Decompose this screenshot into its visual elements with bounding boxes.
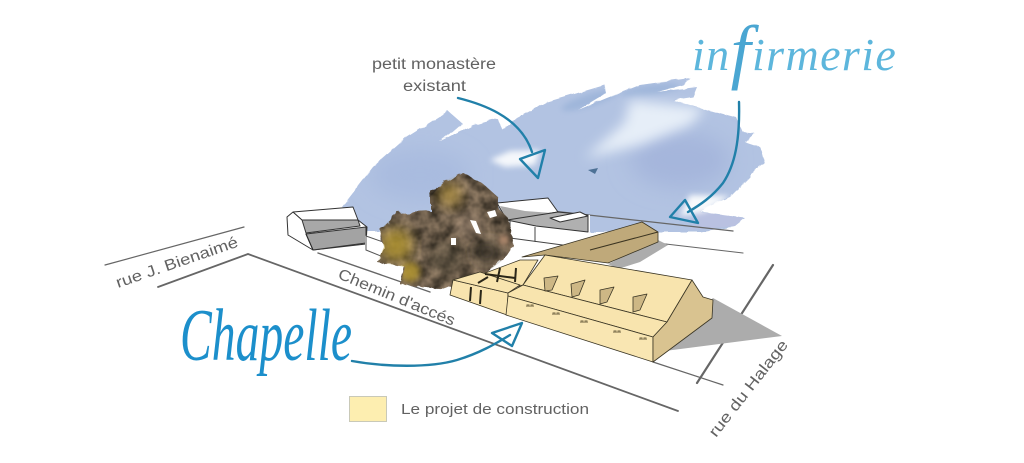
- arrow: Chapelle: [352, 323, 522, 366]
- construction project building: [450, 222, 713, 362]
- title: infirmerie: f: [731, 11, 760, 91]
- title: infirmerie: irmerie: [752, 29, 897, 80]
- dormers: [544, 276, 647, 312]
- left existing building: [287, 207, 367, 250]
- title: Chapelle: Chapelle: [180, 295, 352, 377]
- legend label: Le projet de construction: [401, 401, 589, 418]
- building shadows: [608, 240, 782, 352]
- right existing monastery building: [365, 198, 600, 285]
- label: petit monastère existant: petit monastère: [372, 56, 496, 73]
- arrow: infirmerie: [670, 102, 739, 223]
- tree: [377, 172, 513, 291]
- arrow: monastère: [458, 98, 545, 178]
- windows: [527, 305, 646, 340]
- road lines: [105, 205, 773, 411]
- title: infirmerie: in: [692, 29, 731, 80]
- label: petit monastère existant: existant: [403, 78, 467, 95]
- watercolor background wash: [342, 78, 764, 232]
- label: rue J. Bienaimé: rue J. Bienaimé: [114, 234, 240, 292]
- label: Chemin d'accés: Chemin d'accés: [335, 266, 458, 330]
- legend swatch: [350, 396, 386, 422]
- label: rue du Halage: rue du Halage: [706, 337, 792, 440]
- label: petit monastère existant: [372, 56, 496, 95]
